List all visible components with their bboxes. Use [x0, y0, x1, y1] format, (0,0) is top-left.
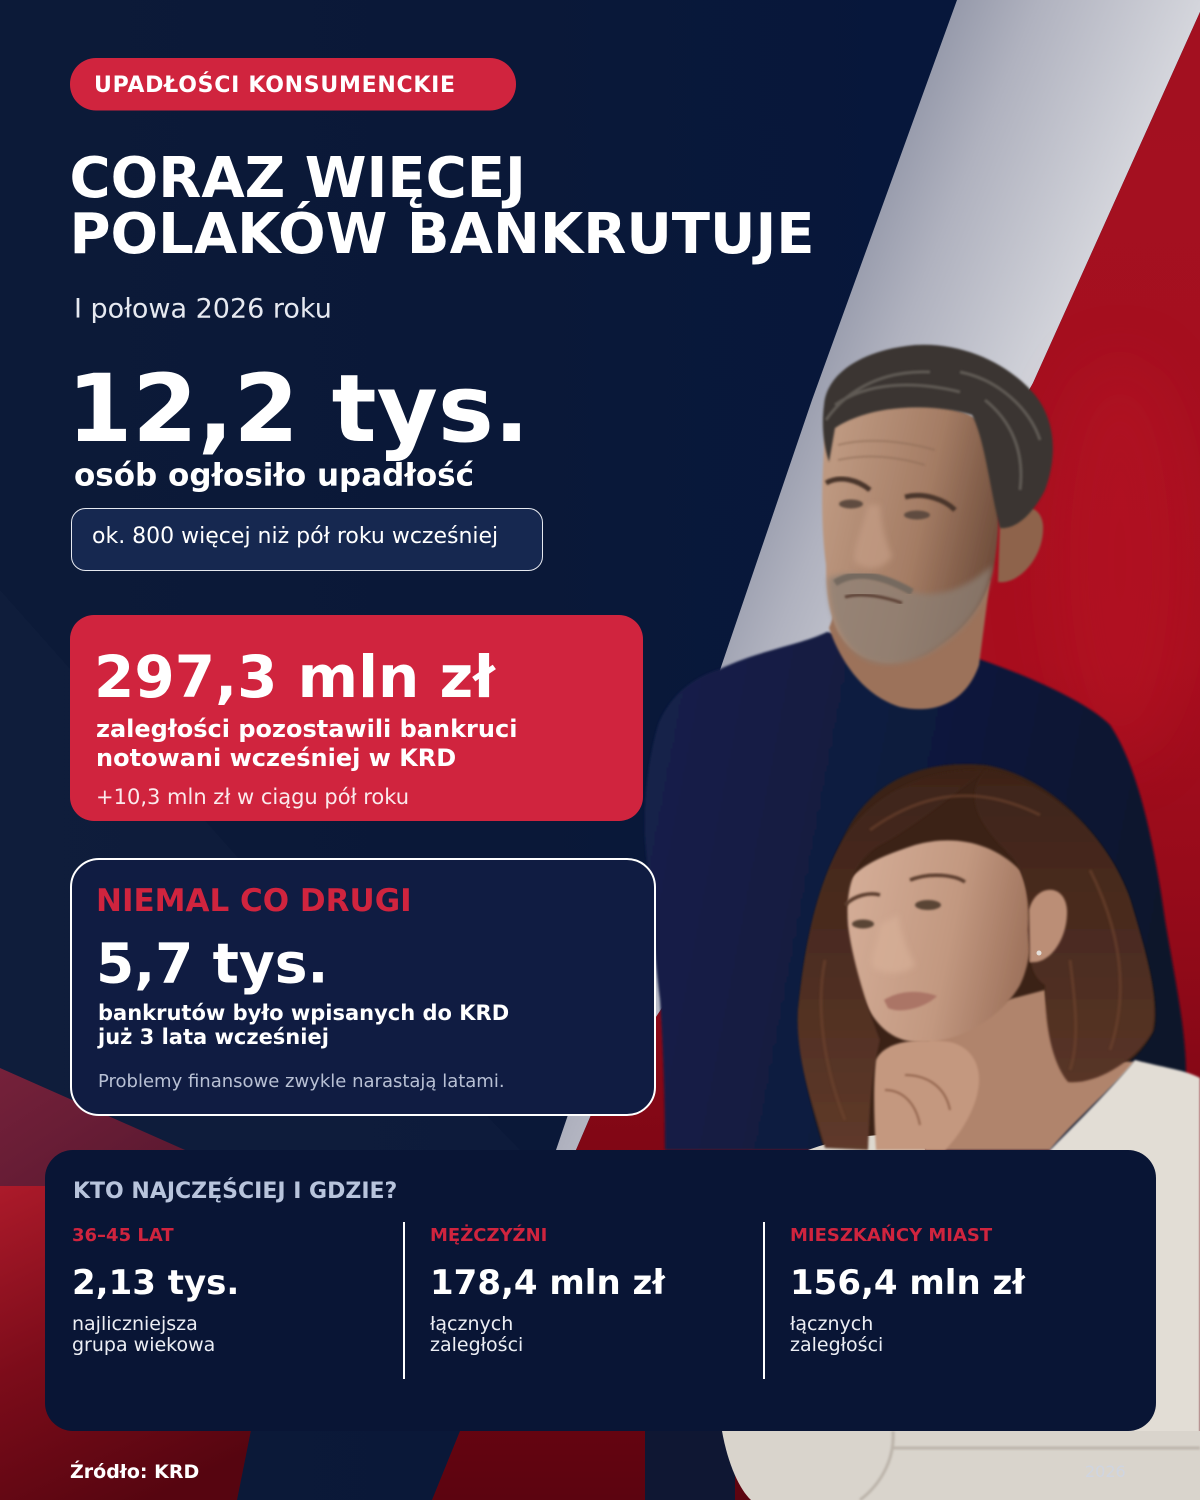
- panel: who and where: [45, 1150, 1156, 1431]
- title: POLAKÓW BANKRUTUJE: [70, 202, 815, 267]
- debts description: [96, 715, 517, 772]
- woman: sweater left and cuff: [808, 1135, 925, 1150]
- panel: debts: [70, 615, 643, 821]
- illustration: worried woman: [722, 764, 1200, 1500]
- column: age: [72, 1225, 239, 1356]
- panel note: Problemy finansowe zwykle narastają latami.: [98, 1071, 505, 1092]
- source: Źródło: KRD: [70, 1460, 199, 1483]
- column: city dwellers: zaległości: [790, 1334, 883, 1356]
- column: age: grupa wiekowa: [72, 1334, 215, 1356]
- man: nose and mouth: [854, 505, 892, 568]
- faint year mark: 2026: [1085, 1462, 1126, 1481]
- woman: neck: [925, 990, 1135, 1150]
- column: city dwellers: 156,4 mln zł: [790, 1263, 1026, 1303]
- woman: hand under chin: [874, 1040, 979, 1150]
- column: city dwellers: [790, 1224, 1026, 1356]
- callout: change in half a year: [72, 508, 542, 570]
- woman: earring: [1036, 950, 1042, 956]
- woman: front hair right: [975, 770, 1154, 1082]
- debts description: notowani wcześniej w KRD: [96, 744, 456, 772]
- woman: sweater: [1040, 1060, 1200, 1435]
- column: city dwellers: MIESZKAŃCY MIAST: [790, 1224, 993, 1246]
- man: neck: [829, 580, 990, 709]
- man: eyes: [839, 500, 930, 520]
- man: stubble beard: [828, 565, 992, 664]
- debts description: zaległości pozostawili bankruci: [96, 715, 517, 743]
- column: age: 2,13 tys.: [72, 1263, 239, 1303]
- badge: UPADŁOŚCI KONSUMENCKIE: [94, 72, 456, 98]
- illustration: worried man: [645, 345, 1186, 1500]
- panel description: [97, 1001, 509, 1049]
- woman: nose and lips: [872, 915, 915, 973]
- column: men: 178,4 mln zł: [430, 1263, 666, 1303]
- woman: back hair: [799, 764, 1155, 1150]
- man: eyebrows: [826, 479, 955, 510]
- column: men: zaległości: [430, 1334, 523, 1356]
- column: men: MĘŻCZYŹNI: [430, 1224, 547, 1246]
- woman: sweater sleeve below the panel: [722, 1431, 1200, 1500]
- man: moustache: [835, 575, 912, 592]
- title: CORAZ WIĘCEJ: [70, 146, 526, 211]
- column: age: 36–45 LAT: [72, 1225, 174, 1246]
- woman: front hair left: [798, 770, 985, 1150]
- man: forehead wrinkles: [838, 441, 935, 465]
- column: city dwellers: łącznych: [790, 1313, 873, 1335]
- panel description: bankrutów było wpisanych do KRD: [98, 1001, 509, 1025]
- title: [70, 146, 815, 267]
- debts change: +10,3 mln zł w ciągu pół roku: [96, 785, 409, 809]
- man: hair: [823, 345, 1053, 528]
- man: sweater: [645, 632, 1186, 1150]
- badge: [70, 58, 516, 110]
- woman: eyebrows: [845, 875, 965, 905]
- man: ear: [998, 508, 1043, 582]
- main figure: 12,2 tys.: osób ogłosiło upadłość: [74, 458, 474, 494]
- panel heading: KTO NAJCZĘŚCIEJ I GDZIE?: [73, 1178, 397, 1204]
- column: men: [430, 1224, 666, 1356]
- man: trousers below the panel: [645, 1431, 735, 1500]
- subtitle: I połowa 2026 roku: [74, 294, 332, 324]
- woman: eyes: [852, 900, 941, 928]
- man: grey hair strands: [826, 372, 1040, 490]
- panel heading: NIEMAL CO DRUGI: [96, 883, 412, 919]
- panel description: już 3 lata wcześniej: [97, 1025, 329, 1049]
- panel value: 5,7 tys.: [96, 932, 328, 996]
- main figure: 12,2 tys.: 12,2 tys.: [67, 355, 530, 464]
- man: face: [822, 402, 999, 663]
- callout: change in half a year: ok. 800 więcej niż pół roku wcześniej: [92, 524, 498, 549]
- panel: almost every second: [71, 859, 655, 1115]
- column: age: najliczniejsza: [72, 1313, 198, 1335]
- woman: ear: [1028, 887, 1067, 962]
- column: men: łącznych: [430, 1313, 513, 1335]
- woman: face: [844, 840, 1031, 1042]
- woman: ear front: [1029, 890, 1067, 962]
- woman: hair strands: [821, 796, 1120, 1120]
- debts value: 297,3 mln zł: [94, 643, 496, 711]
